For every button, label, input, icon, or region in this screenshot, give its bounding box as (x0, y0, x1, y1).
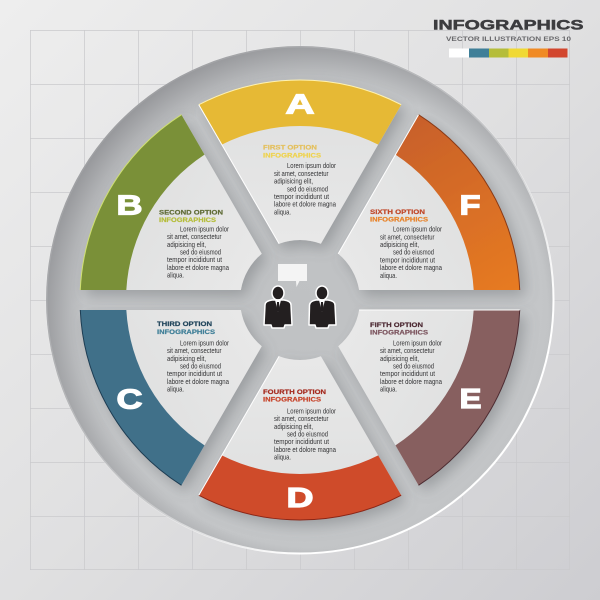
text: sixth option body: sit amet, consectetur (380, 232, 435, 241)
title: INFOGRAPHICS (433, 18, 584, 32)
text: sixth option body: aliqua. (380, 271, 397, 280)
text: sixth option body: sed do eiusmod (393, 248, 434, 257)
text: fourth option body: Lorem ipsum dolor (287, 406, 336, 415)
text: sixth option body: labore et dolore magna (380, 263, 442, 272)
text: first option body: sed do eiusmod (287, 184, 328, 193)
text: fourth option body: sed do eiusmod (287, 429, 328, 438)
heading: first option (263, 144, 321, 160)
text: fifth option body: sed do eiusmod (393, 361, 434, 370)
heading: fourth option: INFOGRAPHICS (263, 396, 321, 404)
text: fifth option body: tempor incididunt ut (380, 369, 435, 378)
heading: fourth option: FOURTH OPTION (263, 389, 327, 396)
text: third option body: sed do eiusmod (180, 361, 221, 370)
panel D: fourth option wedge (199, 356, 401, 520)
panel E: fifth option wedge (298, 240, 541, 498)
text: second option body: Lorem ipsum dolor (180, 224, 229, 233)
text: first option body: labore et dolore magna (274, 200, 336, 209)
letter B: B (116, 190, 142, 220)
text: second option body: tempor incididunt ut (167, 255, 222, 264)
text: fourth option body: sit amet, consectetur (274, 414, 329, 423)
text: sixth option body: Lorem ipsum dolor (393, 225, 442, 234)
heading: third option (157, 321, 215, 336)
heading: second option (159, 210, 224, 224)
text: second option body: adipisicing elit, (167, 240, 206, 249)
text: second option body: sit amet, consectetur (167, 232, 222, 241)
text: third option body: Lorem ipsum dolor (180, 338, 229, 347)
heading: third option: THIRD OPTION (157, 321, 213, 328)
heading: fourth option (263, 389, 327, 404)
text: fourth option body: adipisicing elit, (274, 422, 313, 431)
colour swatches (449, 48, 568, 58)
text: fifth option body: sit amet, consectetur (380, 346, 435, 355)
text: second option body: sed do eiusmod (180, 247, 221, 256)
letter C: C (116, 384, 142, 414)
main disc (46, 46, 554, 554)
icon: right person (309, 286, 336, 328)
heading: second option: SECOND OPTION (159, 210, 224, 216)
text: first option body: aliqua. (274, 207, 291, 216)
panel F: sixth option wedge (298, 102, 541, 360)
heading: first option: FIRST OPTION (263, 144, 318, 152)
text: first option body: adipisicing elit, (274, 177, 313, 186)
text: fifth option body: aliqua. (380, 385, 397, 394)
heading: fifth option (370, 322, 428, 336)
heading: sixth option: INFOGRAPHICS (370, 216, 428, 224)
text: third option body: aliqua. (167, 385, 184, 394)
text: fourth option body: aliqua. (274, 453, 291, 462)
panel C: third option wedge (59, 240, 302, 498)
heading: sixth option (370, 209, 428, 224)
text: third option body: tempor incididunt ut (167, 369, 222, 378)
text: fifth option body: Lorem ipsum dolor (393, 338, 442, 347)
letter D: D (286, 482, 314, 513)
text: sixth option body: tempor incididunt ut (380, 255, 435, 264)
text: sixth option body (380, 225, 442, 280)
icon: left person (264, 286, 292, 328)
text: fourth option body: tempor incididunt ut (274, 437, 329, 446)
panel A: first option wedge (199, 80, 401, 244)
letter F: F (460, 190, 480, 220)
letter A: A (286, 88, 314, 120)
heading: sixth option: SIXTH OPTION (370, 209, 426, 216)
heading: first option: INFOGRAPHICS (263, 152, 321, 160)
icon: speech bubble (278, 264, 307, 287)
text: second option body (167, 224, 229, 280)
text: third option body: sit amet, consectetur (167, 346, 222, 355)
panel B: second option wedge (59, 102, 302, 360)
text: first option body: Lorem ipsum dolor (287, 161, 336, 170)
letter E: E (460, 383, 482, 414)
text: fifth option body: adipisicing elit, (380, 354, 419, 363)
text: second option body: aliqua. (167, 271, 184, 280)
text: second option body: labore et dolore magna (167, 263, 229, 272)
text: fifth option body: labore et dolore magna (380, 377, 442, 386)
text: first option body: sit amet, consectetur (274, 169, 329, 178)
subtitle: VECTOR ILLUSTRATION EPS 10 (446, 36, 571, 43)
heading: fifth option: INFOGRAPHICS (370, 330, 428, 336)
text: third option body: labore et dolore magna (167, 377, 229, 386)
text: fourth option body: labore et dolore magna (274, 445, 336, 454)
heading: fifth option: FIFTH OPTION (370, 322, 424, 329)
text: first option body (274, 161, 336, 216)
text: fourth option body (274, 406, 336, 462)
text: fifth option body (380, 338, 442, 394)
text: first option body: tempor incididunt ut (274, 192, 329, 201)
heading: second option: INFOGRAPHICS (159, 217, 216, 224)
text: third option body: adipisicing elit, (167, 354, 206, 363)
text: third option body (167, 338, 229, 394)
heading: third option: INFOGRAPHICS (157, 329, 215, 336)
header: title and colour key (433, 18, 584, 58)
text: sixth option body: adipisicing elit, (380, 240, 419, 249)
